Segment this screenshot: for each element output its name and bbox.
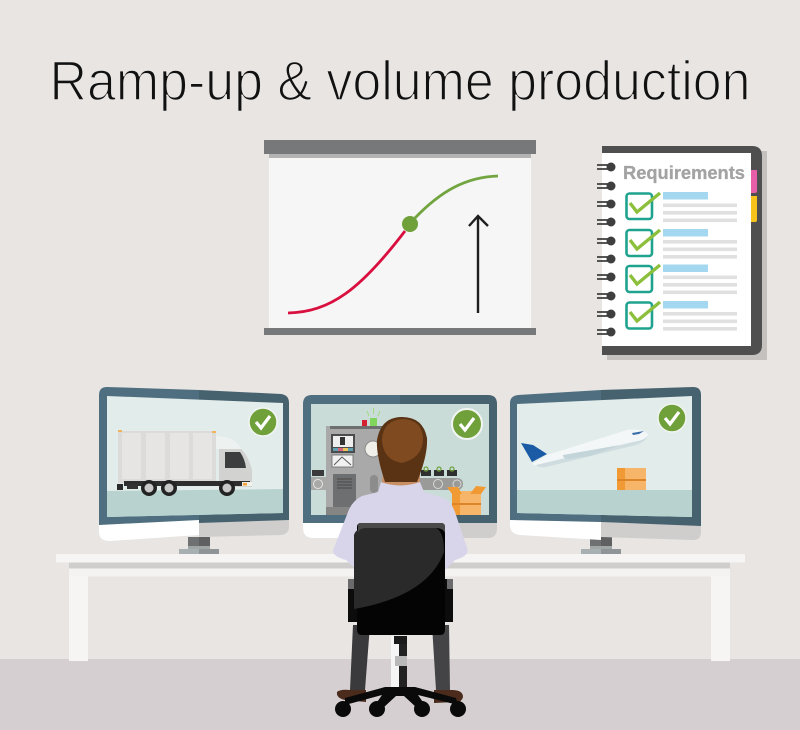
floor	[0, 659, 800, 730]
monitor right: plane	[510, 387, 701, 554]
tabs	[751, 170, 757, 222]
projection screen chart	[264, 140, 536, 335]
ramp-up curve: red segment	[288, 231, 405, 313]
volume curve: green segment	[415, 176, 498, 218]
legs	[350, 625, 450, 690]
packed box	[447, 486, 486, 515]
shirt	[333, 482, 468, 575]
stand	[581, 537, 621, 554]
left conveyor	[311, 470, 326, 490]
spiral rings	[597, 162, 616, 336]
truck	[117, 430, 252, 496]
chair back	[354, 523, 445, 635]
notebook heading: Requirements	[623, 163, 745, 183]
checklist rows	[626, 192, 737, 331]
hair	[377, 417, 427, 482]
milestone dot	[402, 216, 418, 232]
cargo box	[617, 468, 646, 490]
chair base	[335, 687, 466, 717]
monitor left: truck	[99, 387, 289, 554]
requirements notebook	[597, 146, 767, 360]
title: Ramp-up & volume production	[50, 49, 750, 112]
upward arrow	[469, 216, 488, 313]
airplane	[521, 430, 648, 467]
approved check badge	[249, 408, 277, 436]
monitor centre: factory	[303, 395, 497, 538]
chair arms	[348, 579, 453, 622]
stand	[179, 537, 219, 554]
neck	[380, 470, 420, 492]
machine and conveyor	[311, 408, 486, 515]
wheels	[335, 701, 466, 717]
desk	[56, 554, 745, 661]
chair pole	[391, 636, 407, 688]
shoes	[337, 690, 463, 703]
approved check badge	[452, 409, 482, 439]
person in chair	[333, 417, 468, 717]
approved check badge	[658, 404, 686, 432]
right conveyor	[415, 467, 463, 490]
